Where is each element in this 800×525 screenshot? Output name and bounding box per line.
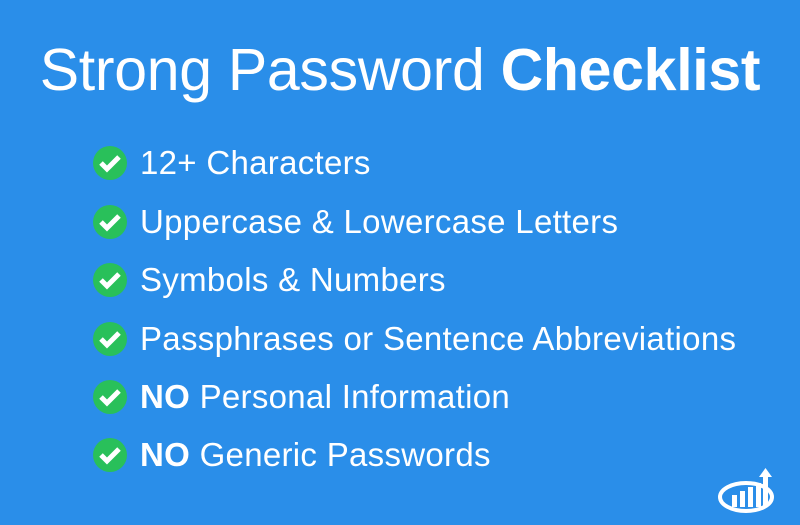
item: personal info: NO [140,378,190,415]
item: generic: NO [140,436,190,473]
item: generic: Generic Passwords [200,436,491,473]
icon: logo [718,468,774,513]
item: passphrases: Passphrases or Sentence Abbreviations [140,320,736,357]
title: Strong Password Checklist [40,37,760,103]
item: letters: Uppercase & Lowercase Letters [140,203,618,240]
item: symbols: Symbols & Numbers [140,261,446,298]
item: personal info: Personal Information [200,378,510,415]
item: characters: 12+ Characters [140,144,371,181]
